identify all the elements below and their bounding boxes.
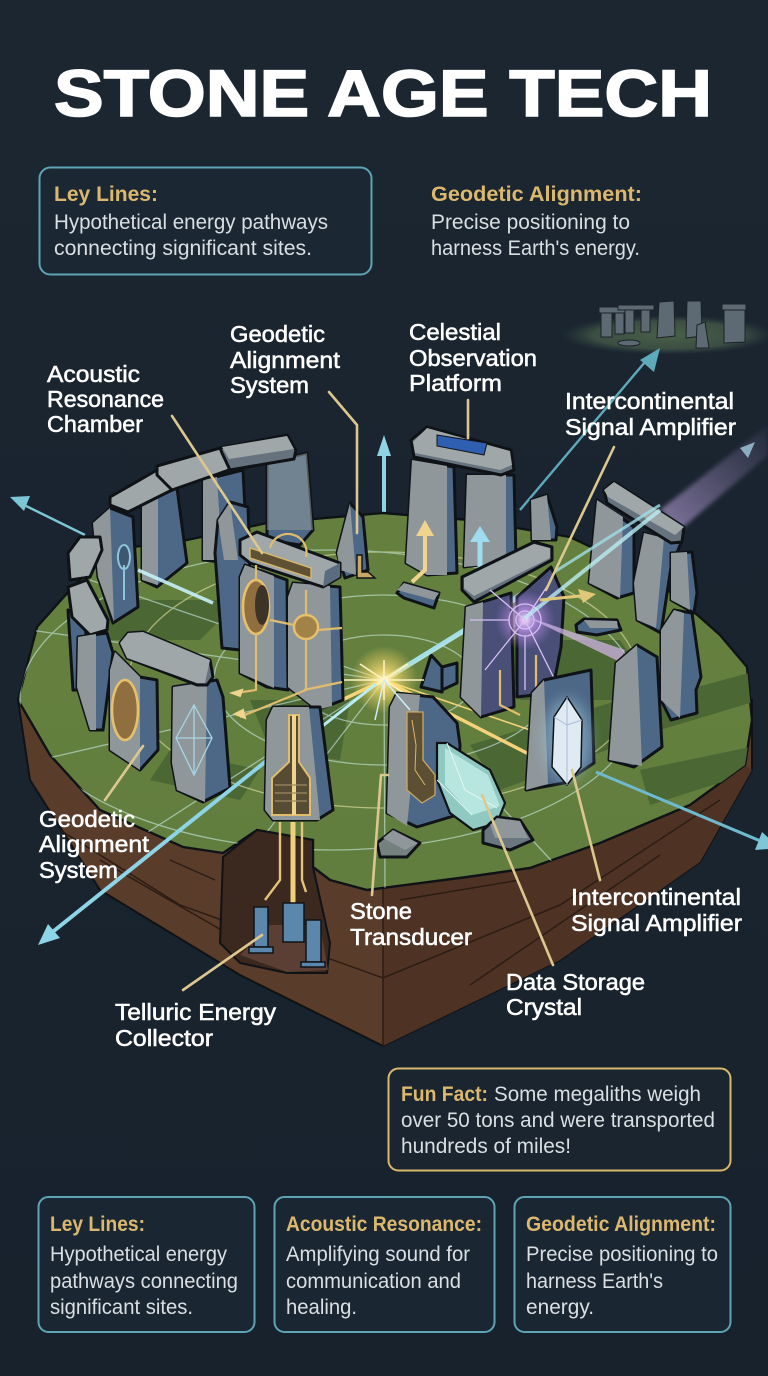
text block: geodetic alignment [431, 183, 642, 260]
icon: big crystal [437, 743, 505, 830]
label: celestial observation platform: Platform [409, 370, 502, 396]
stone trilithon: signal amplifier [461, 510, 660, 717]
panel: acoustic resonance: Amplifying sound for [286, 1243, 470, 1266]
panel: fun fact: hundreds of miles! [401, 1135, 571, 1158]
beam: violet [525, 616, 625, 662]
icon: gold frieze [250, 548, 311, 578]
panel: acoustic resonance: Acoustic Resonance: [286, 1213, 482, 1236]
label: geodetic alignment system left [39, 806, 150, 883]
label: intercontinental signal amplifier bottom: Intercontinental [571, 884, 741, 910]
panel: ley lines callout: Hypothetical energy pathways [54, 211, 328, 234]
panel: ley lines callout: Ley Lines: [54, 183, 158, 206]
label: acoustic resonance chamber: Acoustic [47, 361, 140, 387]
stone: telluric chamber monolith [265, 707, 333, 820]
label: telluric energy collector: Collector [115, 1025, 213, 1051]
island: soil block [18, 700, 752, 1046]
icon: circuit panel [407, 712, 435, 803]
label: telluric energy collector: Telluric Energy [115, 999, 277, 1025]
stone: right standing [609, 610, 701, 767]
label: acoustic resonance chamber: Chamber [47, 411, 143, 437]
arrows behind island [10, 348, 768, 680]
panel: fun fact [388, 1068, 730, 1170]
beam: northwest streak [138, 570, 213, 603]
label: geodetic alignment system left: System [39, 857, 118, 883]
label: geodetic alignment system top [230, 321, 341, 398]
icon: gold up arrow [412, 520, 434, 582]
stone: data crystal monolith [526, 670, 594, 790]
icon: portal [243, 580, 269, 634]
distant stone circle [560, 301, 768, 355]
stone trilithon: acoustic resonance chamber [215, 502, 343, 718]
stone: geodetic marker [357, 555, 375, 578]
label: stone transducer [350, 898, 472, 950]
label: intercontinental signal amplifier top: Intercontinental [565, 388, 734, 414]
panel: acoustic resonance [274, 1197, 494, 1332]
label: acoustic resonance chamber [47, 361, 164, 437]
stone: transducer [387, 693, 460, 827]
label: celestial observation platform: Observation [409, 345, 537, 371]
leader lines [105, 392, 614, 990]
icon: cyan up arrow [470, 526, 490, 572]
underground collectors [249, 822, 325, 967]
panel: geodetic alignment [514, 1197, 730, 1332]
icon: gold conduit [272, 715, 310, 815]
icon: diamond glyph [176, 705, 212, 775]
back ring of stones [68, 435, 697, 730]
panel: ley lines: Ley Lines: [50, 1213, 145, 1236]
icon: star panel [437, 435, 487, 455]
panel: ley lines: Hypothetical energy [50, 1243, 227, 1266]
title: STONE AGE TECH [54, 56, 712, 130]
label: intercontinental signal amplifier bottom: Signal Amplifier [571, 910, 742, 936]
label: stone transducer: Stone [350, 898, 412, 924]
panel: ley lines: significant sites. [50, 1296, 193, 1319]
flat stones [397, 583, 621, 692]
underground chamber [220, 830, 330, 973]
icon: resonator disc [294, 615, 318, 639]
panel: ley lines [38, 1197, 254, 1332]
panel: acoustic resonance: communication and [286, 1270, 461, 1293]
label: geodetic alignment system left: Geodetic [39, 806, 135, 832]
panel: fun fact: over 50 tons and were transported [401, 1109, 715, 1132]
panel: geodetic alignment: Precise positioning to [526, 1243, 718, 1266]
energy grid rings [20, 550, 640, 890]
stone trilithon: geodetic portal [110, 632, 230, 802]
label: intercontinental signal amplifier bottom [571, 884, 742, 936]
label: intercontinental signal amplifier top: Signal Amplifier [565, 414, 736, 440]
beam: southeast ley line [596, 772, 768, 850]
label: telluric energy collector [115, 999, 277, 1051]
panel: ley lines callout [40, 168, 372, 274]
icon: crystal [552, 697, 582, 785]
label: data storage crystal: Crystal [506, 994, 582, 1020]
label: geodetic alignment system top: Geodetic [230, 321, 325, 347]
label: data storage crystal [506, 969, 645, 1020]
label: stone transducer: Transducer [350, 924, 472, 950]
panel: fun fact: Fun Fact: [401, 1083, 488, 1106]
panel: ley lines: pathways connecting [50, 1270, 238, 1293]
label: geodetic alignment system left: Alignment [39, 831, 150, 857]
icon: purple emitter [495, 590, 555, 650]
island: grass top [18, 513, 760, 890]
panel: geodetic alignment: energy. [526, 1296, 594, 1319]
rocks [377, 817, 533, 857]
text block: geodetic alignment: harness Earth's energy. [431, 237, 640, 260]
label: acoustic resonance chamber: Resonance [47, 386, 164, 412]
stone trilithon: celestial observation platform [406, 427, 516, 582]
text block: geodetic alignment: Geodetic Alignment: [431, 183, 642, 206]
panel: acoustic resonance: healing. [286, 1296, 357, 1319]
label: intercontinental signal amplifier top [565, 388, 736, 440]
icon: oval portal [112, 680, 138, 740]
panel: geodetic alignment: Geodetic Alignment: [526, 1213, 716, 1236]
panel: fun fact: Some megaliths weigh [494, 1083, 701, 1106]
label: geodetic alignment system top: Alignment [230, 347, 341, 373]
center energy burst [344, 646, 424, 714]
beams: radial energy [342, 505, 660, 770]
label: data storage crystal: Data Storage [506, 969, 645, 995]
label: geodetic alignment system top: System [230, 372, 309, 398]
beam: southwest ley line [38, 680, 410, 945]
text block: geodetic alignment: Precise positioning to [431, 211, 630, 234]
panel: geodetic alignment: harness Earth's [526, 1270, 663, 1293]
label: celestial observation platform [409, 319, 537, 396]
panel: ley lines callout: connecting significant sites. [54, 237, 312, 260]
label: celestial observation platform: Celestial [409, 319, 501, 345]
